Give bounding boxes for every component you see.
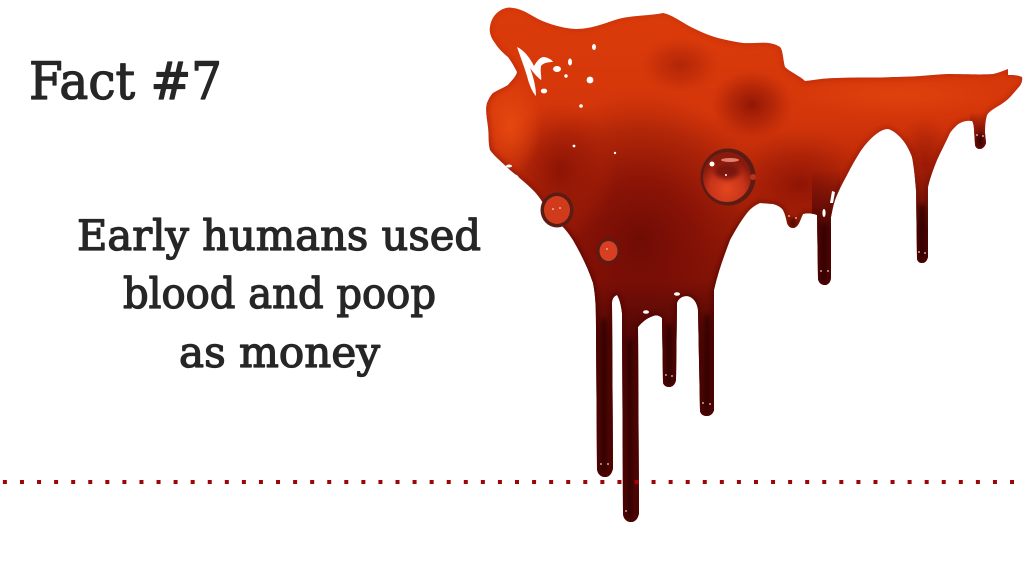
heading: Fact #7: Fact #7 — [29, 53, 222, 112]
droplet: medium — [540, 192, 574, 228]
droplet: small — [596, 238, 620, 264]
body text: early humans fact: as money — [179, 328, 380, 377]
dark rim — [486, 8, 1022, 522]
illustration: dripping blood splatter — [478, 8, 1022, 530]
small glints on drip tips — [600, 134, 984, 512]
shading — [533, 103, 756, 365]
glossy highlights — [506, 44, 835, 314]
dotted line — [3, 480, 1016, 484]
body text: early humans fact — [77, 211, 481, 377]
body text: early humans fact: Early humans used — [77, 211, 481, 260]
droplet: large — [700, 148, 756, 206]
drip core shadows — [604, 135, 980, 518]
body text: early humans fact: blood and poop — [123, 269, 436, 318]
